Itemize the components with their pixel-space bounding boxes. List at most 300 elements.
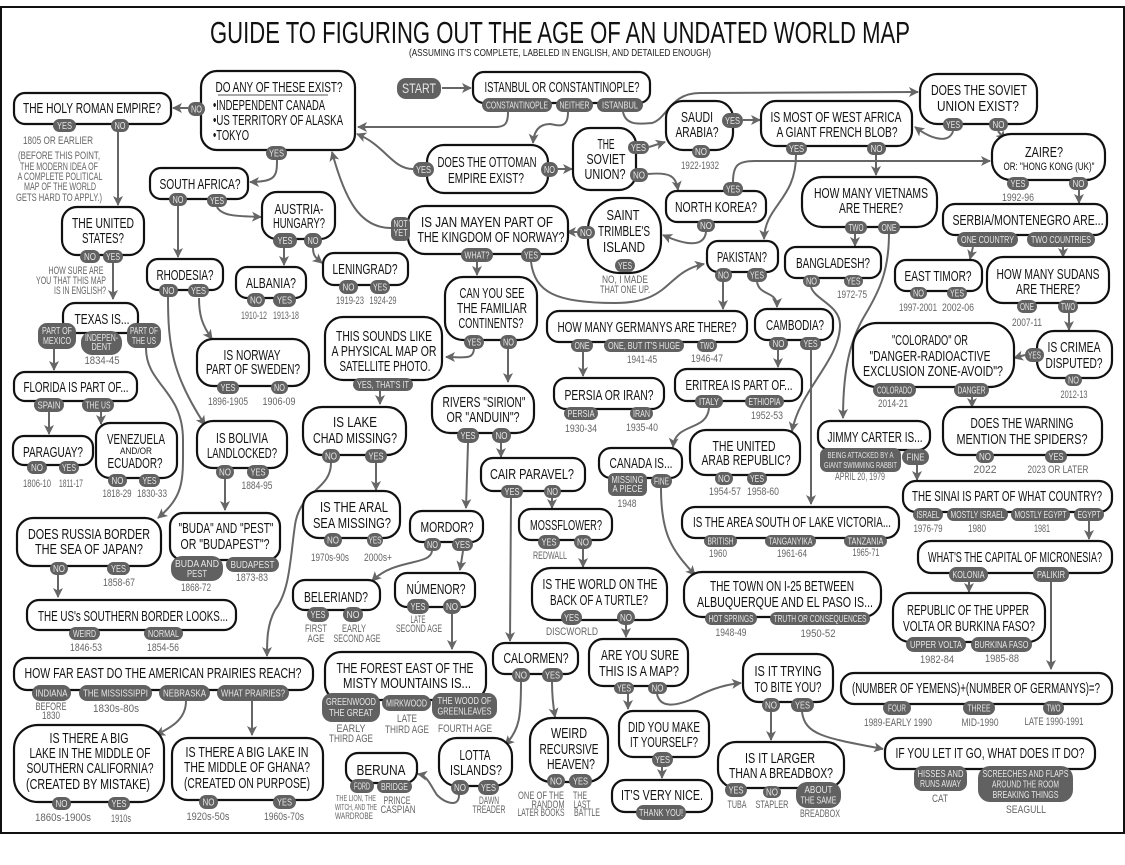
panel: Southern California lake	[14, 725, 164, 810]
pill: yes: YES	[846, 276, 860, 288]
panel: Ottoman Empire	[413, 145, 558, 193]
arrow: Lake Chad no to prairies	[267, 463, 331, 656]
dates: California	[35, 812, 131, 825]
panel: familiar continents: THE FAMILIAR	[457, 300, 527, 317]
arrow: Holy Roman no path	[173, 107, 188, 109]
panel: Sinai	[903, 481, 1112, 521]
panel: United States: STATES?	[82, 230, 124, 247]
pill: no: NO	[454, 782, 466, 794]
panel: Soviet Union exist: UNION EXIST?	[937, 98, 1019, 115]
panel: Austria-Hungary	[262, 192, 335, 248]
dates: border: 1846-53	[70, 642, 102, 654]
date: Canada: 1948	[618, 498, 636, 510]
dates: Aral	[311, 552, 392, 564]
panel: North Korea	[666, 182, 766, 232]
pill: Truth or Consequences	[770, 612, 870, 625]
date: Saudi: 1922-1932	[681, 160, 719, 172]
date note: before 1805: THE MODERN IDEA OF	[20, 161, 98, 173]
panel: Upper Volta: VOLTA OR BURKINA FASO?	[903, 618, 1035, 635]
panel: Pakistan: PAKISTAN?	[717, 249, 767, 266]
pill: Nebraska	[159, 685, 210, 701]
panel: Germanys: HOW MANY GERMANYS ARE THERE?	[558, 319, 736, 336]
panel: Mordor: MORDOR?	[420, 519, 474, 536]
panel: Beruna: BERUNA	[356, 762, 406, 779]
dates: California: 1910s	[111, 813, 131, 825]
panel: Holy Roman Empire	[14, 93, 171, 132]
arrow: Vietnam one to Jimmy Carter	[843, 233, 889, 418]
dates: Germanys	[627, 353, 723, 366]
dates: Leningrad	[336, 295, 396, 307]
label: late second age	[396, 614, 442, 635]
arrow: Egypt to Micronesia	[1088, 521, 1090, 539]
pill: Iran: IRAN	[633, 408, 650, 420]
arrow: Russia no to border	[57, 575, 59, 597]
dates: UAR	[709, 486, 779, 498]
arrow: North Korea yes to Zaire	[733, 161, 990, 182]
panel: Venezuela: VENEZUELA	[107, 431, 165, 448]
pill: Mississippi	[79, 685, 152, 701]
panel: Colorado danger: EXCLUSION ZONE-AVOID"?	[863, 363, 1003, 380]
pill: Istanbul	[597, 98, 643, 112]
labels: Beleriand ages: SECOND AGE	[334, 633, 380, 645]
pill: no: NO	[718, 473, 730, 485]
arrow: Florida US to Venezuela	[100, 412, 102, 424]
panel: Pakistan	[707, 241, 778, 282]
arrow: Rhodesia no to Bolivia	[168, 297, 205, 425]
arrow: Sudans two to Crimea	[1068, 313, 1070, 330]
arrow: Saint Trimble no to Jan Mayen	[567, 231, 577, 233]
labels: Beleriand ages: AGE	[308, 633, 324, 645]
arrow: Germanys one to Persia	[582, 352, 584, 376]
panel: Cambodia	[755, 309, 833, 350]
pill: Hot Springs	[705, 612, 757, 625]
date note: before 1805: GETS HARD TO APPLY.)	[16, 192, 102, 204]
note: how sure: HOW SURE ARE	[48, 265, 104, 277]
arrow: Cair no to Mossflower	[551, 498, 553, 508]
pill: no	[199, 795, 218, 809]
pill: fine: FINE	[654, 476, 669, 488]
panel: warning spiders: DOES THE WARNING	[970, 415, 1074, 432]
dates: Sinai: 1981	[1034, 523, 1050, 535]
panel: Southern California lake: LAKE IN THE MIDDLE OF	[30, 745, 150, 762]
pill: two: TWO	[1061, 301, 1075, 313]
pill: no: NO	[446, 601, 458, 613]
arrow: Zaire no to Serbia	[1078, 190, 1080, 203]
pill: yes: YES	[368, 534, 382, 546]
panel: are you sure: THIS IS A MAP?	[599, 663, 679, 680]
panel: very nice	[612, 780, 712, 820]
pill: Budapest: BUDAPEST	[230, 559, 275, 571]
panel: American prairies: HOW FAR EAST DO THE AMERICAN PRAIRIES REACH?	[24, 665, 302, 682]
pill: Greenwood the Great	[322, 693, 380, 722]
pill: one country	[957, 232, 1018, 247]
pill: no: NO	[346, 609, 360, 621]
panel: Forest east of Misty Mountains: THE FOREST EAST OF THE	[336, 660, 474, 677]
pill: no: NO	[772, 338, 784, 350]
pill: no: NO	[515, 670, 527, 682]
pill: mostly Israel	[947, 508, 1008, 521]
dates: East Timor: 2002-06	[942, 302, 974, 314]
dates: Albania: 1913-18	[273, 310, 299, 322]
pill: hisses	[914, 766, 967, 791]
panel: Southern California lake: (CREATED BY MISTAKE)	[26, 776, 150, 793]
pill: screeches	[978, 766, 1073, 802]
labels: Beleriand ages: EARLY	[342, 623, 366, 635]
dates: Paraguay: 1811-17	[59, 478, 83, 490]
panel: Leningrad: LENINGRAD?	[332, 261, 398, 278]
labels: Beruna books: THE LION, THE	[336, 794, 376, 803]
dates: Leningrad: 1924-29	[370, 295, 396, 307]
arrow: Jan Mayen not yet to Do any	[332, 152, 391, 228]
panel: Canada	[599, 448, 682, 496]
panel: West Africa	[761, 101, 912, 155]
pill: thank you: THANK YOU!	[639, 807, 683, 819]
pill: yes: YES	[373, 282, 387, 294]
panel: Jan Mayen: IS JAN MAYEN PART OF	[421, 214, 553, 231]
panel: bite	[743, 654, 833, 712]
pill: yes: YES	[106, 251, 120, 263]
panel: breadbox	[718, 742, 844, 808]
pill: yes: YES	[950, 288, 964, 300]
pill: one country: ONE COUNTRY	[961, 234, 1014, 246]
pill: no	[541, 162, 558, 177]
pill: rabbit attack: BEING ATTACKED BY A	[828, 451, 894, 460]
labels: Narnia books: LATER BOOKS	[518, 807, 564, 819]
pill: yes: YES	[481, 782, 496, 794]
pill: Upper Volta: UPPER VOLTA	[910, 639, 962, 651]
labels: Beruna books: PRINCE	[384, 795, 410, 807]
dates: Venezuela: 1818-29	[102, 488, 132, 500]
panel: Soviet Union: UNION?	[584, 166, 626, 183]
panel: warning spiders	[943, 407, 1102, 463]
panel: Beleriand: BELERIAND?	[304, 589, 368, 606]
arrow: North Korea no to Saint Trimble	[663, 232, 706, 243]
panel: Weird recursive heaven	[530, 718, 608, 788]
pill: one: ONE	[882, 222, 896, 234]
panel: Russia: DOES RUSSIA BORDER	[28, 526, 150, 543]
arrow: Austria no to Leningrad	[313, 248, 322, 263]
panel: Albania	[236, 267, 306, 307]
panel: Town on I-25: ALBUQUERQUE AND EL PASO IS...	[697, 594, 873, 611]
panel: If you let it go	[885, 738, 1095, 802]
panel: Austria-Hungary: AUSTRIA-	[274, 201, 324, 218]
pill: yes: YES	[57, 120, 72, 132]
panel: Buda and Pest	[170, 513, 280, 581]
pill: what	[461, 248, 493, 262]
pill: Italy: ITALY	[699, 396, 719, 408]
pill: yes: YES	[410, 601, 426, 613]
arrow: Constantinople to Do any exist	[358, 112, 508, 127]
pill: no: NO	[652, 682, 664, 694]
arrow: Numenor no to forest	[451, 614, 453, 649]
panel: Numenor	[395, 573, 475, 614]
dates: Sinai: 1980	[968, 523, 986, 535]
arrow: Cambodia no to Eritrea	[777, 350, 779, 367]
panel: Eritrea: ERITREA IS PART OF...	[686, 377, 792, 394]
panel: Ghana lake: IS THERE A BIG LAKE IN	[186, 744, 308, 761]
panel: Saudi Arabia	[666, 101, 743, 158]
dates: Upper Volta	[920, 653, 1019, 666]
pill: no: NO	[550, 776, 562, 788]
date note: before 1805: A COMPLETE POLITICAL	[18, 171, 102, 183]
arrow: Lotta no to Beruna	[418, 774, 459, 803]
arrow: Florida Spain to Paraguay	[48, 412, 50, 434]
pill: yes: YES	[467, 336, 481, 348]
date: Russia: 1858-67	[103, 577, 135, 589]
pill: yes: YES	[946, 119, 960, 131]
panel: Vietnams: HOW MANY VIETNAMS	[814, 185, 928, 202]
pill: Wood of Greenleaves: THE WOOD OF	[438, 695, 492, 707]
panel: United States	[62, 207, 144, 263]
label: Discworld: DISCWORLD	[546, 626, 598, 638]
panel: very nice: IT'S VERY NICE.	[621, 787, 703, 804]
pill: danger	[954, 383, 989, 397]
pill: British: BRITISH	[708, 536, 734, 548]
dates: Sinai: 1976-79	[914, 523, 942, 535]
pill: one	[571, 339, 593, 352]
dates: Town: 1948-49	[716, 627, 746, 639]
start node: START	[402, 80, 436, 96]
pill: Israel: ISRAEL	[916, 509, 940, 521]
pill: Colorado: COLORADO	[877, 384, 912, 396]
panel: Venezuela: AND/OR	[120, 446, 152, 456]
pill: about the same: ABOUT	[804, 784, 833, 796]
pill: no	[111, 119, 129, 132]
pill: yes: YES	[750, 270, 764, 282]
dates: spiders	[974, 464, 1089, 476]
pill: yes: YES	[655, 754, 670, 766]
pill: yes that's it: YES, THAT'S IT	[357, 379, 409, 391]
panel: turtle	[532, 568, 667, 625]
panel: Ghana lake: THE MIDDLE OF GHANA?	[184, 759, 310, 776]
panel: Do any of these exist	[188, 71, 355, 160]
pill: Buda and Pest	[171, 556, 223, 581]
dates: Norway: 1906-09	[262, 396, 296, 408]
arrow: sure yes to did you make	[627, 694, 629, 709]
panel: Rivers	[432, 386, 534, 443]
panel: southern border	[27, 600, 236, 640]
pill: yes: YES	[795, 700, 810, 712]
panel: Albania: ALBANIA?	[246, 275, 296, 292]
panel: Bolivia	[197, 421, 287, 479]
dates: border: 1854-56	[147, 642, 179, 654]
pill: rabbit attack: GIANT SWIMMING RABBIT	[824, 461, 897, 470]
panel: did you make it: DID YOU MAKE	[628, 719, 700, 736]
labels: breadbox	[728, 799, 840, 820]
dates: East Timor: 1997-2001	[899, 302, 937, 314]
pill: no: NO	[765, 700, 777, 712]
panel: Texas: TEXAS IS...	[74, 311, 130, 328]
pill: yes: YES	[542, 536, 556, 548]
dates: prairies: BEFORE	[36, 701, 66, 713]
panel: Rivers: OR "ANDUIN"?	[446, 409, 520, 426]
pill: no: NO	[544, 164, 555, 176]
panel: Soviet Union: THE	[598, 136, 614, 153]
pill: no: NO	[577, 536, 589, 548]
dates: Venezuela: 1830-33	[137, 488, 167, 500]
pill: Mirkwood: MIRKWOOD	[386, 698, 427, 710]
pill: Persia: PERSIA	[568, 408, 594, 420]
pill: no: NO	[913, 288, 924, 300]
pill: two countries: TWO COUNTRIES	[1031, 234, 1091, 246]
panel: Soviet Union	[573, 128, 649, 190]
panel: did you make it: IT YOURSELF?	[630, 734, 698, 751]
dates: Albania: 1910-12	[241, 310, 267, 322]
subtitle: (ASSUMING IT'S COMPLETE, LABELED IN ENGLISH, AND DETAILED ENOUGH)	[409, 48, 711, 59]
panel: Calormen	[493, 643, 578, 682]
panel: Texas	[38, 303, 161, 355]
pill: no: NO	[695, 146, 707, 158]
pill: about the same: THE SAME	[800, 794, 836, 806]
panel: Cambodia: CAMBODIA?	[766, 317, 824, 334]
arrow: Ottoman no to Soviet Union	[558, 168, 572, 170]
arrow: Serbia one country to East Timor	[970, 247, 973, 259]
pill: mostly Egypt: MOSTLY EGYPT	[1014, 509, 1067, 521]
pill: yes: YES	[573, 776, 588, 788]
dates: Persia	[565, 422, 658, 435]
dates: Upper Volta: 1982-84	[920, 654, 954, 666]
pill: yes	[266, 146, 287, 160]
dates: Ghana: 1960s-70s	[264, 811, 304, 823]
panel: familiar continents: CONTINENTS?	[458, 315, 524, 332]
labels: breadbox: STAPLER	[756, 799, 789, 811]
pill: yes: YES	[62, 462, 76, 474]
labels: Narnia books: LAST	[574, 799, 591, 811]
panel: Yemens plus Germanys	[841, 673, 1112, 715]
pill: no: NO	[308, 235, 318, 247]
panel: Ghana lake	[172, 738, 323, 809]
arrow: United States yes to Texas	[112, 263, 114, 299]
panel: Do any of these exist: •US TERRITORY OF ALASKA	[213, 112, 343, 129]
panel: Lake Chad	[303, 407, 406, 463]
panel: Lake Victoria	[682, 507, 899, 548]
arrow: Soviet exist no to Zaire	[998, 131, 1005, 140]
arrow: Rivers no to Cair	[500, 443, 502, 457]
pill: not yet: YET	[394, 227, 408, 239]
labels: Narnia books: ONE OF THE	[518, 790, 564, 802]
date: Sudans: 2007-11	[1012, 317, 1042, 329]
panel: Cair Paravel	[481, 458, 585, 498]
note: made that one up: THAT ONE UP.	[600, 284, 650, 296]
dates: Sinai	[914, 523, 1050, 535]
panel: physical map: SATELLITE PHOTO.	[340, 358, 430, 375]
dates: Norway: 1896-1905	[208, 396, 248, 408]
pill: yes: YES	[277, 796, 292, 808]
panel: Weird recursive heaven: HEAVEN?	[547, 756, 595, 773]
pill: yes: YES	[142, 475, 156, 487]
pill: no: NO	[172, 194, 184, 206]
labels: cat and seagull: SEAGULL	[1006, 804, 1046, 816]
label: Dawn Treader: DAWN	[479, 795, 499, 807]
panel: Vietnams	[802, 177, 937, 234]
panel: Austria-Hungary: HUNGARY?	[273, 215, 325, 232]
panel: Soviet Union: SOVIET	[586, 151, 626, 168]
panel: East Timor	[895, 260, 982, 300]
pill: Buda and Pest: BUDA AND	[175, 558, 219, 570]
panel: are you sure: ARE YOU SURE	[601, 647, 679, 664]
label: late second age: LATE	[410, 614, 426, 626]
pill: yes: YES	[1048, 451, 1064, 463]
pill: yes: YES	[210, 195, 224, 207]
arrow: Bangladesh no to UAR	[792, 287, 840, 431]
pill: yes: YES	[545, 670, 560, 682]
pill: no: NO	[1068, 374, 1079, 386]
panel: Lotta Islands: ISLANDS?	[450, 762, 502, 779]
panel: turtle: IS THE WORLD ON THE	[542, 576, 658, 593]
arrow: South Africa yes to Austria	[217, 207, 261, 217]
arrow: Jan Mayen yes to Pakistan	[531, 262, 704, 303]
date: Eritrea: 1952-53	[751, 410, 783, 422]
arrow: Soviet exist yes to West Africa	[915, 127, 953, 139]
pill: yes: YES	[504, 486, 520, 498]
panel: Jan Mayen: THE KINGDOM OF NORWAY?	[418, 229, 564, 246]
labels: Beruna books: WITCH, AND THE	[335, 803, 377, 812]
note: made that one up	[600, 274, 650, 296]
pill: Palikir	[1033, 567, 1069, 582]
panel: Paraguay	[13, 436, 93, 474]
pill: Indiana: INDIANA	[36, 688, 68, 700]
pill: yes: YES	[631, 142, 646, 154]
panel: Jimmy Carter	[818, 421, 930, 472]
pill: part of Mexico: PART OF	[42, 325, 72, 337]
panel: are you sure	[589, 639, 688, 694]
panel: Weird recursive heaven: WEIRD	[551, 725, 587, 742]
panel: Colorado danger: "DANGER-RADIOACTIVE	[870, 348, 990, 365]
dates: UAR: 1958-60	[747, 486, 779, 498]
panel: Soviet Union exist	[920, 74, 1037, 131]
label: Dawn Treader	[472, 795, 506, 816]
pill: Truth or Consequences: TRUTH OR CONSEQUENCES	[774, 613, 866, 625]
dates: Venezuela	[102, 488, 167, 500]
pill: no: NO	[84, 251, 96, 263]
pill: yes: YES	[111, 563, 126, 575]
dates: Lake Victoria	[709, 547, 880, 560]
panel: Ghana lake: (CREATED ON PURPOSE)	[184, 775, 310, 792]
panel: Paraguay: PARAGUAY?	[23, 444, 83, 461]
panel: Town on I-25	[684, 572, 881, 625]
panel: Florida: FLORIDA IS PART OF...	[24, 379, 128, 396]
arrow: sure no to bite	[657, 683, 741, 705]
pill: one: ONE	[574, 340, 590, 352]
panel: West Africa: A GIANT FRENCH BLOB?	[776, 124, 898, 141]
dates: Buda	[181, 572, 268, 594]
arrow: photo to Lake Chad	[379, 390, 381, 404]
pill: Ford: FORD	[354, 780, 370, 792]
panel: East Timor: EAST TIMOR?	[904, 268, 972, 285]
arrow: bite no to breadbox	[770, 712, 772, 740]
pill: Mississippi: THE MISSISSIPPI	[83, 688, 148, 700]
labels: breadbox: BREADBOX	[800, 808, 840, 820]
panel: Leningrad	[323, 253, 408, 294]
pill: fine: FINE	[906, 452, 924, 464]
pill: Mirkwood	[382, 695, 431, 711]
pill: one: ONE	[1020, 301, 1034, 313]
note: made that one up: NO, I MADE	[602, 274, 648, 286]
labels: cat and seagull: CAT	[932, 793, 948, 805]
pill: no: NO	[56, 798, 68, 810]
arrow: Holy Roman no to United States	[117, 132, 119, 205]
panel: Jimmy Carter: JIMMY CARTER IS...	[828, 429, 922, 446]
pill: yes: YES	[416, 164, 431, 176]
pill: screeches: SCREECHES AND FLAPS	[982, 768, 1068, 780]
panel: Lake Chad: CHAD MISSING?	[313, 430, 397, 447]
pill: Egypt: EGYPT	[1078, 509, 1101, 521]
panel: Bolivia: LANDLOCKED?	[207, 445, 277, 462]
pill: Buda and Pest: PEST	[187, 568, 207, 580]
pill: not yet: NOT	[394, 218, 408, 230]
pill: yes: YES	[112, 798, 126, 810]
pill: yes: YES	[617, 682, 631, 694]
